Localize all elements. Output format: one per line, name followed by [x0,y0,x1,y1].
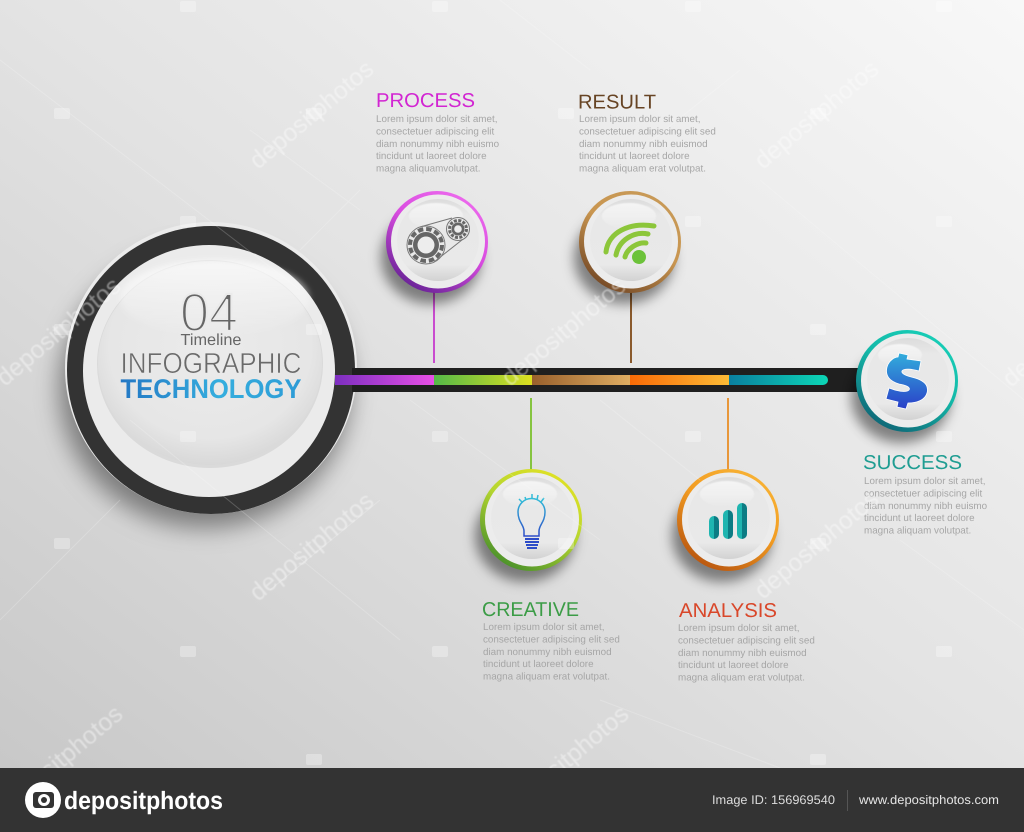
result connector [630,290,632,363]
watermark: diagonal lines and depositphotos marks: depositphotos [500,700,634,820]
success heading: SUCCESS [863,452,962,474]
creative text: consectetuer adipiscing elit sed [483,634,620,646]
creative text: tincidunt ut laoreet dolore [483,659,594,670]
creative heading: CREATIVE [482,599,579,621]
success text: magna aliquam volutpat. [864,526,971,536]
result text: tincidunt ut laoreet dolore [579,151,690,162]
footer bar [0,768,1024,832]
main title text: TECHNOLOGY [120,374,302,404]
main title text: INFOGRAPHIC [120,348,302,380]
timeline colour segments [335,375,828,385]
creative connector [530,398,532,472]
result button [574,191,681,304]
watermark: diagonal lines and depositphotos marks: depositphotos [750,55,884,175]
icon: camera logo [25,782,61,818]
analysis heading: ANALYSIS [679,600,777,622]
main title text [120,283,302,404]
main title text: 04 [180,283,238,343]
analysis text: tincidunt ut laoreet dolore [678,660,789,671]
icon: bar chart [709,503,747,539]
logo text: depositphotos [64,787,223,815]
creative button [475,469,582,582]
success text: Lorem ipsum dolor sit amet, [864,476,985,487]
result text: Lorem ipsum dolor sit amet, [579,114,700,125]
process text: magna aliquamvolutpat. [376,164,481,174]
success text: diam nonummy nibh euismo [864,501,988,512]
watermark: diagonal lines and depositphotos marks: depositphotos [245,487,379,607]
step: process [376,90,500,363]
process text: consectetuer adipiscing elit [376,126,494,138]
process text: tincidunt ut laoreet dolore [376,151,487,162]
step: result [574,92,716,363]
creative text: Lorem ipsum dolor sit amet, [483,622,604,633]
success text: tincidunt ut laoreet dolore [864,513,975,524]
website: www.depositphotos.com [858,793,999,807]
timeline bar [352,368,865,392]
analysis text: diam nonummy nibh euismod [678,648,807,659]
result text: consectetuer adipiscing elit sed [579,126,716,138]
process button [381,191,488,304]
analysis text: consectetuer adipiscing elit sed [678,636,815,646]
result text: diam nonummy nibh euismod [579,139,708,150]
icon: light bulb [518,494,545,548]
step: creative [475,398,620,682]
analysis text: magna aliquam erat volutpat. [678,672,805,684]
result text: magna aliquam erat volutpat. [579,164,706,174]
icon: wifi [606,225,654,264]
watermark: diagonal lines and depositphotos marks: depositphotos [750,485,884,605]
watermark: diagonal lines and depositphotos marks: depositphotos [497,272,631,392]
creative text: magna aliquam erat volutpat. [483,672,610,682]
process connector [433,290,435,363]
success button [851,330,958,443]
process heading: PROCESS [376,90,475,112]
process text: diam nonummy nibh euismo [376,139,500,150]
analysis text: Lorem ipsum dolor sit amet, [678,623,799,634]
analysis connector [727,398,729,472]
process text: Lorem ipsum dolor sit amet, [376,114,497,125]
watermark: diagonal lines and depositphotos marks: depositphotos [245,55,379,175]
step: analysis [672,398,815,684]
image id: Image ID: 156969540 [712,793,835,807]
icon: dollar [886,353,928,409]
analysis button [672,469,779,582]
main circle [59,222,865,528]
step: success [851,330,988,536]
result heading: RESULT [578,92,656,114]
creative text: diam nonummy nibh euismod [483,647,612,658]
icon: gears with belt [407,218,470,264]
success text: consectetuer adipiscing elit [864,488,982,500]
main title text: Timeline [180,332,242,349]
